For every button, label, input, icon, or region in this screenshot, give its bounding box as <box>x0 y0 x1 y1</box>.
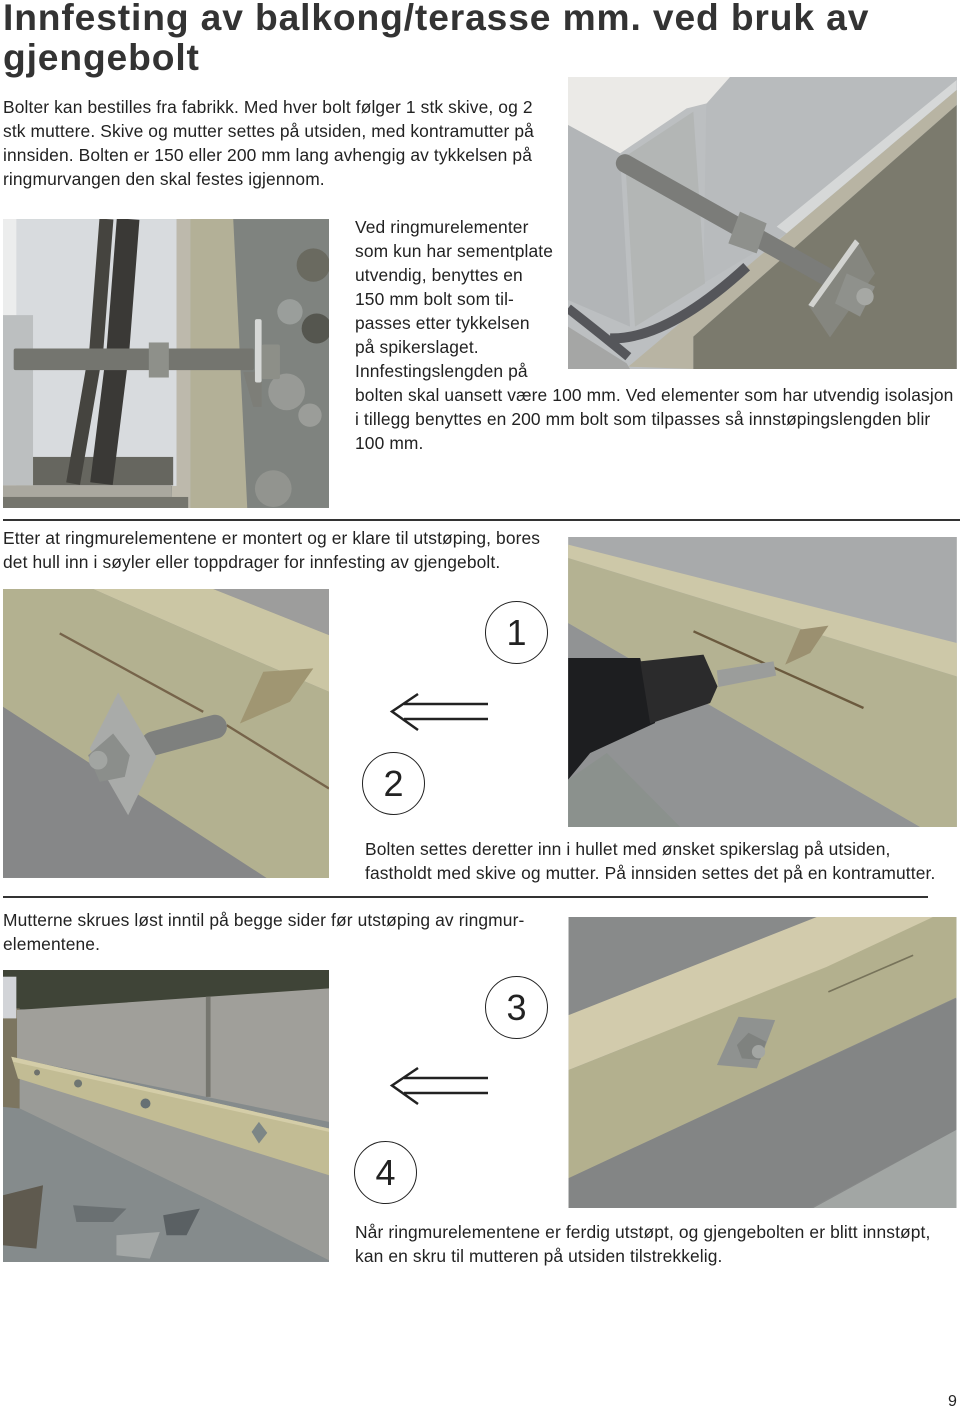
divider <box>3 896 928 898</box>
text: tightening: Når ringmurelementene er ferdig utstøpt, og gjengebolten er blitt innstøpt, <box>355 1222 930 1242</box>
text: inserting bolt <box>365 839 935 883</box>
intro text: stk muttere. Skive og mutter settes på utsiden, med kontramutter på <box>3 121 534 141</box>
text: inserting bolt: fastholdt med skive og mutter. På innsiden settes det på en kontramutter. <box>365 863 935 883</box>
side text about 150 mm bolt: i tillegg benyttes en 200 mm bolt som tilpasses så innstøpingslengden blir <box>355 409 930 429</box>
photo: finished fastening <box>568 917 956 1208</box>
title: gjengebolt <box>3 36 200 78</box>
photo: bolt inserted in timber <box>3 589 329 878</box>
photo: bolt in section view <box>3 219 329 508</box>
text: drilling: Etter at ringmurelementene er montert og er klare til utstøping, bores <box>3 528 540 548</box>
side text about 150 mm bolt: utvendig, benyttes en <box>355 265 523 285</box>
arrow between steps 1 and 2 <box>390 693 488 731</box>
step number 2 <box>362 752 425 815</box>
text: drilling: det hull inn i søyler eller toppdrager for innfesting av gjengebolt. <box>3 552 500 572</box>
arrow between steps 3 and 4 <box>390 1067 488 1105</box>
side text about 150 mm bolt: bolten skal uansett være 100 mm. Ved elementer som har utvendig isolasjon <box>355 385 953 405</box>
step number 2: 2 <box>383 763 404 804</box>
step number 3: 3 <box>506 987 527 1028</box>
photo: wall with timber <box>3 970 329 1262</box>
intro text: ringmurvangen den skal festes igjennom. <box>3 169 325 189</box>
side text about 150 mm bolt: passes etter tykkelsen <box>355 313 530 333</box>
text: tightening <box>355 1222 930 1266</box>
divider <box>3 519 960 521</box>
side text about 150 mm bolt: 100 mm. <box>355 433 424 453</box>
photo: bolt through formwork corner <box>568 77 957 369</box>
text: loosen nuts: Mutterne skrues løst inntil på begge sider før utstøping av ringmur- <box>3 910 524 930</box>
text: loosen nuts <box>3 910 524 954</box>
side text about 150 mm bolt: Innfestingslengden på <box>355 361 528 381</box>
side text about 150 mm bolt: som kun har sementplate <box>355 241 553 261</box>
intro text: innsiden. Bolten er 150 eller 200 mm lang avhengig av tykkelsen på <box>3 145 532 165</box>
intro text: Bolter kan bestilles fra fabrikk. Med hver bolt følger 1 stk skive, og 2 <box>3 97 533 117</box>
step number 4: 4 <box>375 1152 396 1193</box>
step number 4 <box>354 1141 417 1204</box>
title <box>3 0 869 78</box>
side text about 150 mm bolt: på spikerslaget. <box>355 337 479 357</box>
step number 1 <box>485 601 548 664</box>
intro text <box>3 97 534 189</box>
side text about 150 mm bolt: Ved ringmurelementer <box>355 217 528 237</box>
side text about 150 mm bolt <box>355 217 953 453</box>
text: loosen nuts: elementene. <box>3 934 100 954</box>
text: tightening: kan en skru til mutteren på utsiden tilstrekkelig. <box>355 1246 723 1266</box>
text: inserting bolt: Bolten settes deretter inn i hullet med ønsket spikerslag på utsiden, <box>365 839 890 859</box>
text: drilling <box>3 528 540 572</box>
photo: drilling in timber <box>568 537 957 827</box>
side text about 150 mm bolt: 150 mm bolt som til- <box>355 289 514 309</box>
step number 1: 1 <box>506 612 527 653</box>
step number 3 <box>485 976 548 1039</box>
